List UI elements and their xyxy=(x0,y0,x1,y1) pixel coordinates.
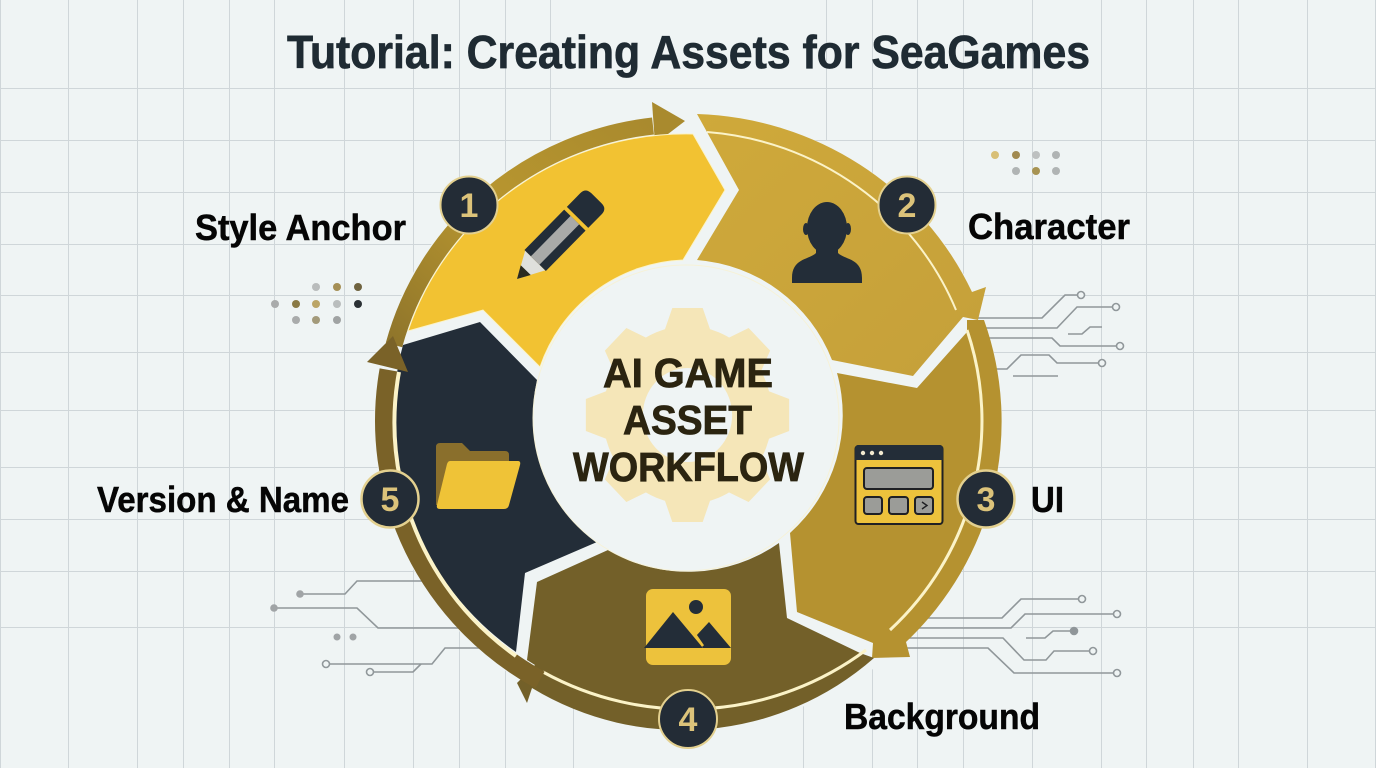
circuit lines: lower left xyxy=(270,581,480,676)
dots: upper right xyxy=(991,151,1060,175)
workflow cycle diagram xyxy=(362,102,1014,748)
icon: person xyxy=(792,202,862,283)
title: Tutorial: Creating Assets for SeaGames xyxy=(287,26,1090,78)
badge 3: 3 xyxy=(977,481,995,519)
badge 4: 4 xyxy=(679,701,698,739)
circuit lines: upper right xyxy=(975,292,1124,376)
badge 5 xyxy=(362,470,418,528)
icon: gear xyxy=(586,308,789,522)
label: Style Anchor: Style Anchor xyxy=(195,207,406,248)
label: Version and Name: Version & Name xyxy=(97,479,349,520)
circuit lines: lower right xyxy=(895,596,1120,676)
icon: pencil xyxy=(506,188,607,290)
label: Background: Background xyxy=(844,696,1040,737)
badge 4 xyxy=(659,690,717,748)
badge 3 xyxy=(958,470,1014,528)
icon: image xyxy=(644,589,731,665)
icon: folder xyxy=(436,443,520,509)
badge 2: 2 xyxy=(898,187,916,225)
segment 2: Character xyxy=(697,114,986,376)
segment 4: Background xyxy=(517,543,874,730)
label: Character: Character xyxy=(968,206,1130,247)
segment 1: Style Anchor xyxy=(367,102,725,372)
badge 1 xyxy=(440,176,498,234)
segment 5: Version and Name xyxy=(385,322,597,680)
badge 5: 5 xyxy=(381,481,399,519)
center text xyxy=(573,350,804,490)
badge 2 xyxy=(878,176,936,234)
segment 3: UI xyxy=(790,320,1002,658)
center text: ASSET xyxy=(623,397,752,443)
icon: UI window xyxy=(855,445,943,524)
center hub xyxy=(533,265,839,571)
badge 1: 1 xyxy=(460,187,478,225)
center text: WORKFLOW xyxy=(573,444,804,490)
label: UI: UI xyxy=(1031,479,1064,520)
dots: upper left xyxy=(271,283,362,324)
center text: AI GAME xyxy=(603,350,773,396)
